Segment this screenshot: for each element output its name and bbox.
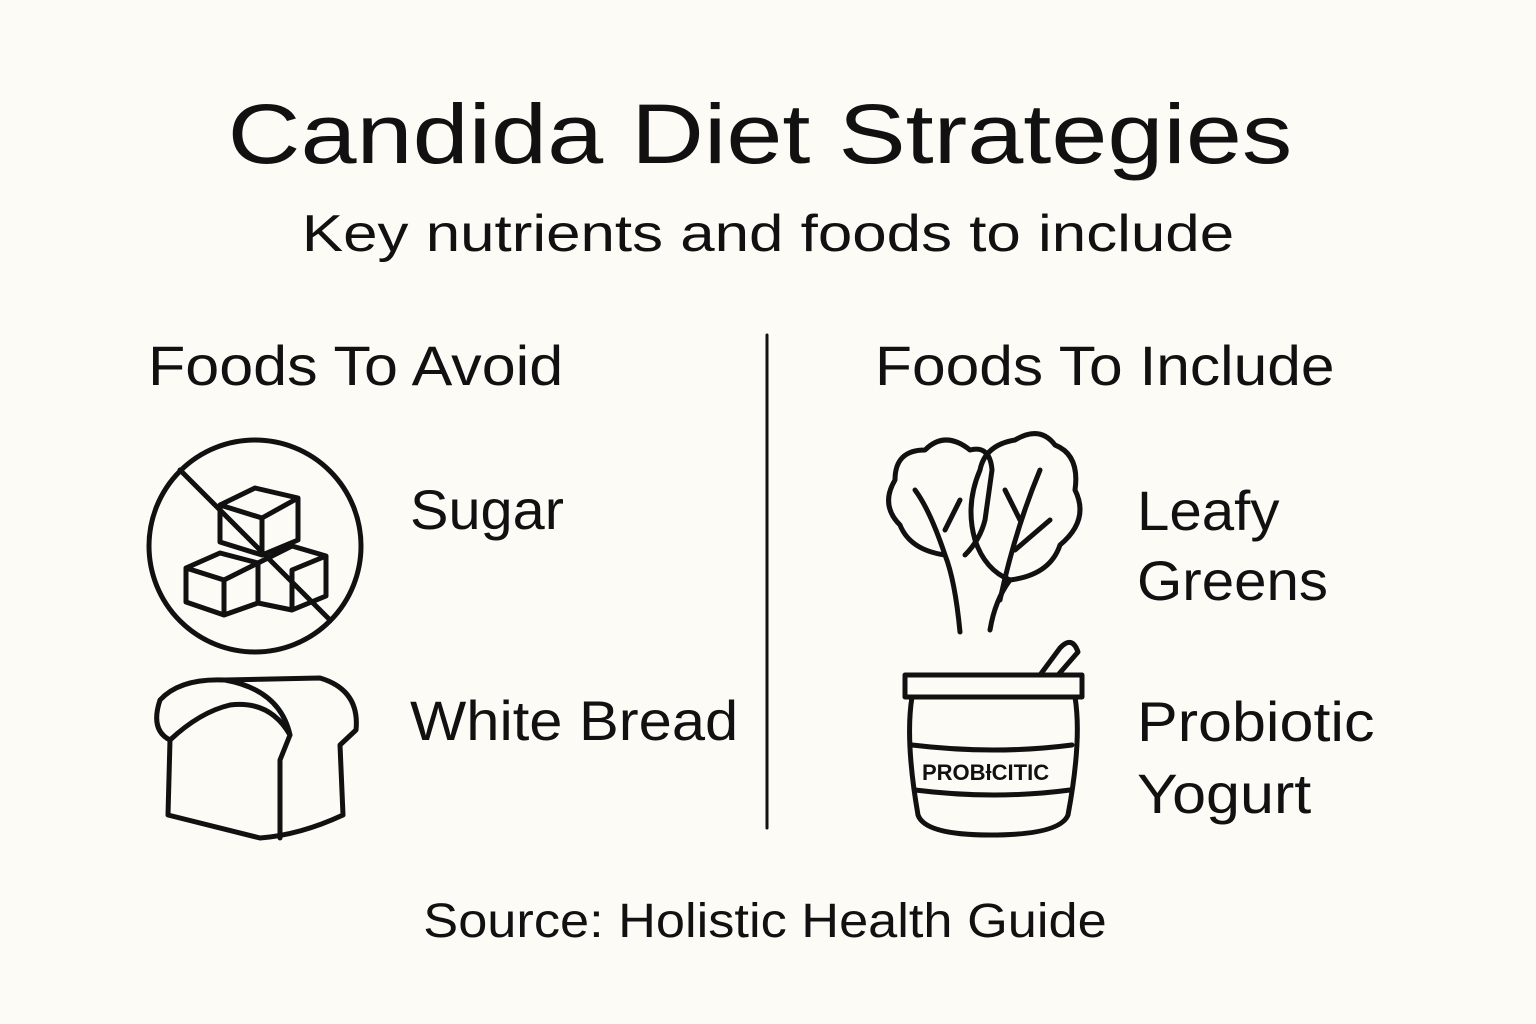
icon: no sugar [149, 440, 361, 652]
item: leafy greens: Leafy [1137, 479, 1279, 542]
source: Source: Holistic Health Guide [423, 895, 1107, 948]
divider [766, 335, 768, 828]
subtitle: Key nutrients and foods to include [302, 205, 1234, 263]
icon: probiotic yogurt [905, 642, 1082, 835]
title: Candida Diet Strategies [228, 87, 1292, 181]
item: probiotic yogurt [1137, 690, 1374, 825]
yogurt label: PROBƚCITIC [922, 760, 1049, 785]
item: probiotic yogurt: Probiotic [1137, 690, 1374, 753]
item: white bread: White Bread [410, 689, 738, 752]
item: probiotic yogurt: Yogurt [1137, 762, 1311, 825]
icon: white bread [157, 678, 356, 838]
item: sugar: Sugar [410, 478, 564, 541]
item: leafy greens: Greens [1137, 549, 1328, 612]
icon: leafy greens [889, 434, 1080, 632]
heading: foods to include: Foods To Include [875, 334, 1335, 397]
item: leafy greens [1137, 479, 1328, 612]
heading: foods to avoid: Foods To Avoid [148, 334, 563, 397]
